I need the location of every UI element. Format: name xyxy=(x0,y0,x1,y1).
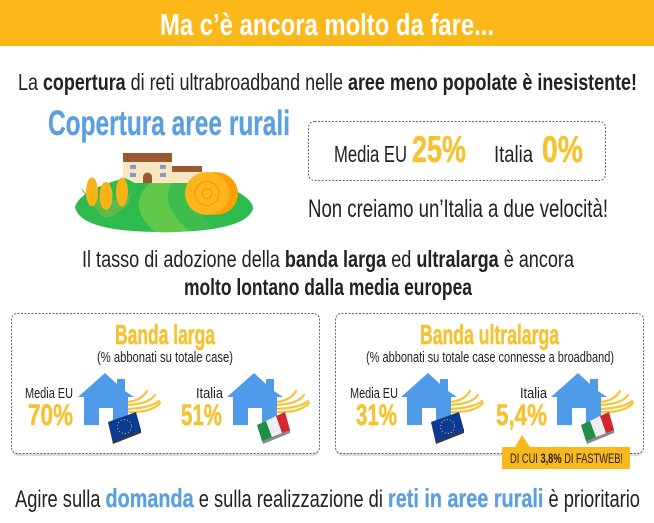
callout: Fastweb share: DI CUI 3,8% DI FASTWEB! xyxy=(510,451,623,466)
panel: ultra-broadband xyxy=(336,314,644,456)
panel: broadband: (% abbonati su totale case) xyxy=(97,349,233,366)
panel: coverage comparison: Italia xyxy=(494,141,533,167)
panel: ultra-broadband: Banda ultralarga xyxy=(420,319,559,350)
panel: broadband: 51% xyxy=(181,399,222,432)
panel: coverage comparison: 25% xyxy=(412,129,466,170)
callout: Fastweb share xyxy=(502,435,630,469)
panel: broadband: Media EU xyxy=(25,386,73,402)
statement: adoption rate: molto lontano dalla media europea xyxy=(184,274,472,300)
panel: broadband: Banda larga xyxy=(115,319,215,350)
conclusion: Agire sulla domanda e sulla realizzazione di reti in aree rurali è prioritario xyxy=(15,483,640,513)
illustration: rural landscape xyxy=(75,153,253,232)
panel: broadband xyxy=(12,314,320,456)
header banner: Ma c’è ancora molto da fare... xyxy=(160,7,494,42)
panel: broadband: Italia xyxy=(196,386,224,402)
header banner xyxy=(0,0,654,46)
panel: coverage comparison: Media EU xyxy=(334,141,407,167)
panel: coverage comparison: 0% xyxy=(542,129,583,170)
panel: broadband: 70% xyxy=(28,399,73,432)
panel: ultra-broadband: 31% xyxy=(356,399,397,432)
statement: adoption rate xyxy=(82,246,574,300)
panel: ultra-broadband: Italia xyxy=(520,386,548,402)
statement: adoption rate: Il tasso di adozione della banda larga ed ultralarga è ancora xyxy=(82,246,574,272)
panel: ultra-broadband: 5,4% xyxy=(496,399,547,432)
panel: coverage comparison xyxy=(308,122,606,180)
heading: rural areas: Copertura aree rurali xyxy=(48,104,290,143)
panel: ultra-broadband: Media EU xyxy=(350,386,398,402)
